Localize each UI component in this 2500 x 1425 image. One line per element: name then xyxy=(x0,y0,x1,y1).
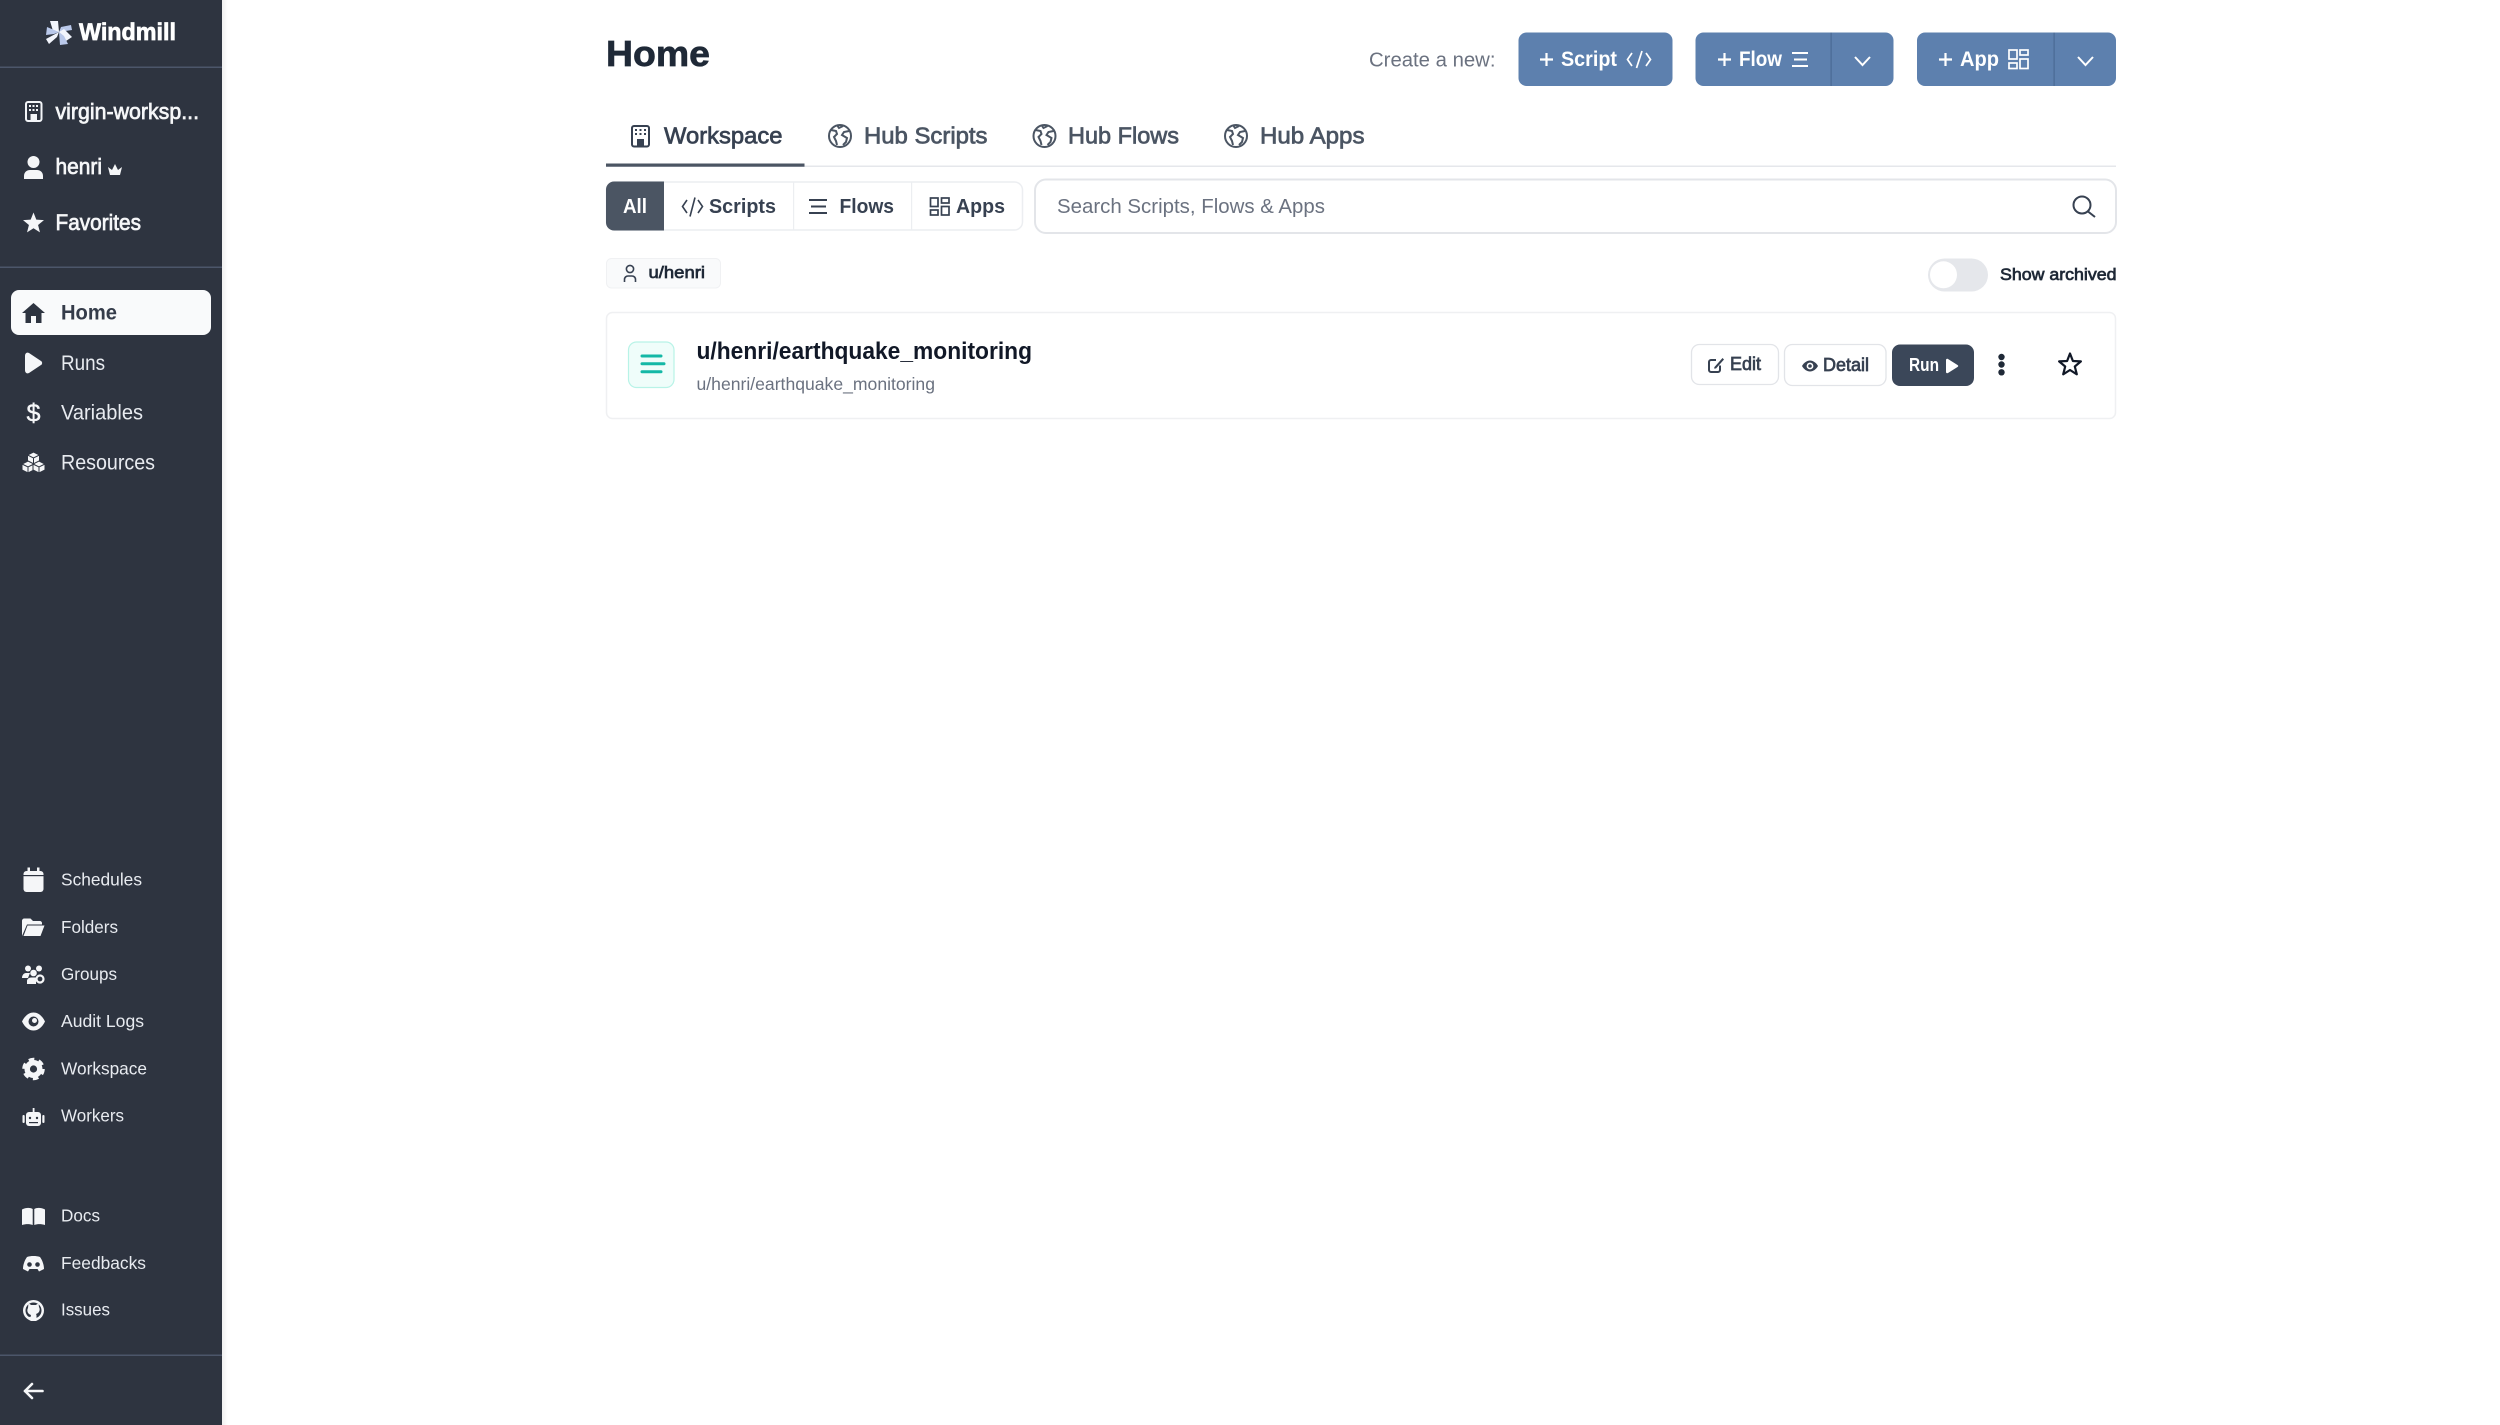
tabs xyxy=(606,122,2116,167)
button: detail xyxy=(1784,344,1886,386)
nav item: variables: Variables xyxy=(61,402,143,424)
nav item: home (active): Home xyxy=(61,302,117,324)
tab: workspace: Workspace xyxy=(664,122,782,148)
nav item: schedules: Schedules xyxy=(61,870,142,890)
menu item: user: henri xyxy=(56,154,102,179)
menu item: user xyxy=(24,154,122,179)
nav item: folders: Folders xyxy=(61,917,118,937)
nav item: variables: $ xyxy=(26,400,41,428)
button: detail: Detail xyxy=(1823,355,1869,375)
menu item: workspace selector: virgin-worksp... xyxy=(56,99,199,124)
toggle: show archived: Show archived xyxy=(2000,265,2116,284)
nav item: resources xyxy=(22,452,155,474)
button: new app: App xyxy=(1960,48,1999,71)
filter: apps: Apps xyxy=(956,196,1005,218)
nav item: feedbacks xyxy=(23,1253,146,1273)
tab: hub flows: Hub Flows xyxy=(1068,122,1179,148)
icon: flow xyxy=(628,342,674,388)
nav item: workers: Workers xyxy=(61,1106,124,1126)
button: new flow xyxy=(1696,32,1894,86)
nav item: groups: Groups xyxy=(61,964,117,984)
filter chip: u/henri: u/henri xyxy=(648,263,705,282)
icon: favorite star xyxy=(2059,354,2081,374)
filter: scripts: Scripts xyxy=(709,196,776,218)
filter: flows xyxy=(809,196,894,218)
tab: hub scripts: Hub Scripts xyxy=(864,122,988,148)
nav item: audit logs xyxy=(22,1011,144,1031)
nav item: schedules xyxy=(24,868,142,892)
button: new flow: Flow xyxy=(1739,48,1783,71)
filter chip: u/henri xyxy=(606,258,720,288)
nav item: issues: Issues xyxy=(61,1300,110,1320)
tab: hub apps: Hub Apps xyxy=(1260,122,1364,148)
toggle: show archived xyxy=(1928,258,2116,292)
nav item: runs xyxy=(25,352,105,375)
nav item: feedbacks: Feedbacks xyxy=(61,1253,146,1273)
subtitle: u/henri/earthquake_monitoring xyxy=(696,374,935,395)
button: edit xyxy=(1692,344,1778,384)
button: edit: Edit xyxy=(1730,354,1761,374)
nav item: workspace settings xyxy=(24,1058,147,1078)
nav item: runs: Runs xyxy=(61,352,105,375)
icon: more menu xyxy=(1998,354,2005,375)
icon: collapse arrow xyxy=(25,1384,42,1398)
nav item: variables xyxy=(26,400,143,428)
search box xyxy=(1035,180,2116,233)
logo: Windmill: Windmill xyxy=(79,19,176,46)
filter: item type selector: All xyxy=(623,196,647,218)
nav item: issues xyxy=(23,1300,110,1321)
filter: flows: Flows xyxy=(840,196,894,218)
nav item: home (active) xyxy=(11,290,211,335)
button: new script: Script xyxy=(1561,48,1617,71)
menu item: favorites: Favorites xyxy=(56,210,141,235)
button: new app xyxy=(1917,32,2116,86)
label: create a new: Create a new: xyxy=(1369,48,1496,72)
button: new script xyxy=(1518,32,1672,86)
nav item: audit logs: Audit Logs xyxy=(61,1011,144,1031)
button: run xyxy=(1892,344,1974,386)
nav item: workers xyxy=(22,1106,124,1126)
filter: item type selector xyxy=(606,182,1022,230)
nav item: docs xyxy=(22,1206,100,1226)
menu item: favorites xyxy=(23,210,141,235)
nav item: workspace settings: Workspace xyxy=(61,1058,147,1078)
nav item: folders xyxy=(22,917,118,937)
heading: Home: Home xyxy=(606,33,710,74)
nav item: resources: Resources xyxy=(61,452,155,474)
search box: Search Scripts, Flows & Apps xyxy=(1057,195,1325,218)
title: u/henri/earthquake_monitoring xyxy=(696,338,1032,365)
panel: sidebar xyxy=(0,0,228,1425)
button: run: Run xyxy=(1909,355,1939,375)
nav item: docs: Docs xyxy=(61,1206,100,1226)
card: earthquake monitoring flow xyxy=(606,312,2116,418)
icon: search xyxy=(2074,196,2095,217)
nav item: groups xyxy=(22,964,117,984)
filter: apps xyxy=(930,196,1005,218)
